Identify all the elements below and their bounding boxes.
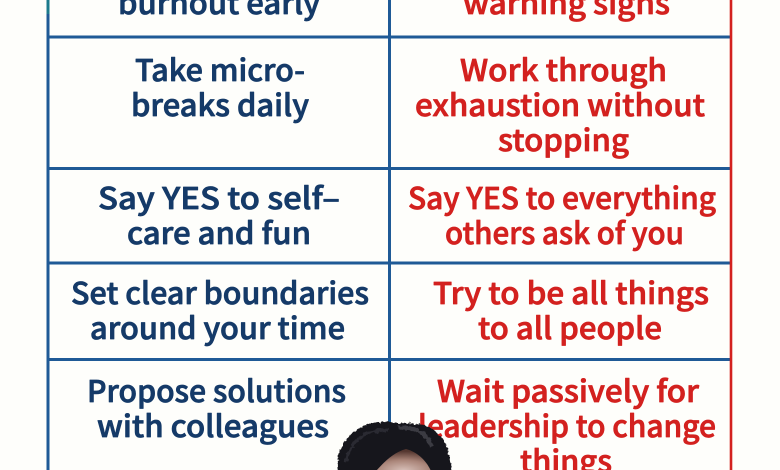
cell: try to be all things: to all people xyxy=(478,304,662,348)
cell: work through exhaustion xyxy=(415,46,705,160)
cell: say yes to self-care: care and fun xyxy=(127,209,311,253)
cell: propose solutions: with colleagues xyxy=(97,402,329,446)
right column: harmful actions xyxy=(408,0,716,470)
cell: take micro-breaks xyxy=(131,46,309,125)
cell: say yes to everything: others ask of you xyxy=(445,209,684,253)
cell: wait passively: leadership to change xyxy=(418,402,716,446)
cell: work through exhaustion: exhaustion without xyxy=(415,81,705,125)
cell: set clear boundaries: Set clear boundaries xyxy=(71,269,369,313)
cell: propose solutions: Propose solutions xyxy=(87,367,346,411)
cell: take micro-breaks: Take micro- xyxy=(135,46,305,90)
cell: try to be all things xyxy=(433,269,709,348)
cell: say yes to everything: Say YES to everything xyxy=(408,174,716,218)
portrait: person's head at bottom xyxy=(337,422,451,470)
cell: say yes to self-care: Say YES to self– xyxy=(98,174,340,218)
cell: set clear boundaries xyxy=(71,269,369,348)
cell: say yes to self-care xyxy=(98,174,340,253)
cell: wait passively: Wait passively for xyxy=(437,367,700,411)
cell: say yes to everything xyxy=(408,174,716,253)
cell: work through exhaustion: Work through xyxy=(460,46,667,90)
cell: propose solutions xyxy=(87,367,346,446)
cell: work through exhaustion: stopping xyxy=(498,116,629,160)
left column: healthy actions xyxy=(71,0,369,446)
cell: take micro-breaks: breaks daily xyxy=(131,81,309,125)
cell: try to be all things: Try to be all things xyxy=(433,269,709,313)
cell: wait passively xyxy=(418,367,716,470)
cell: set clear boundaries: around your time xyxy=(90,304,345,348)
